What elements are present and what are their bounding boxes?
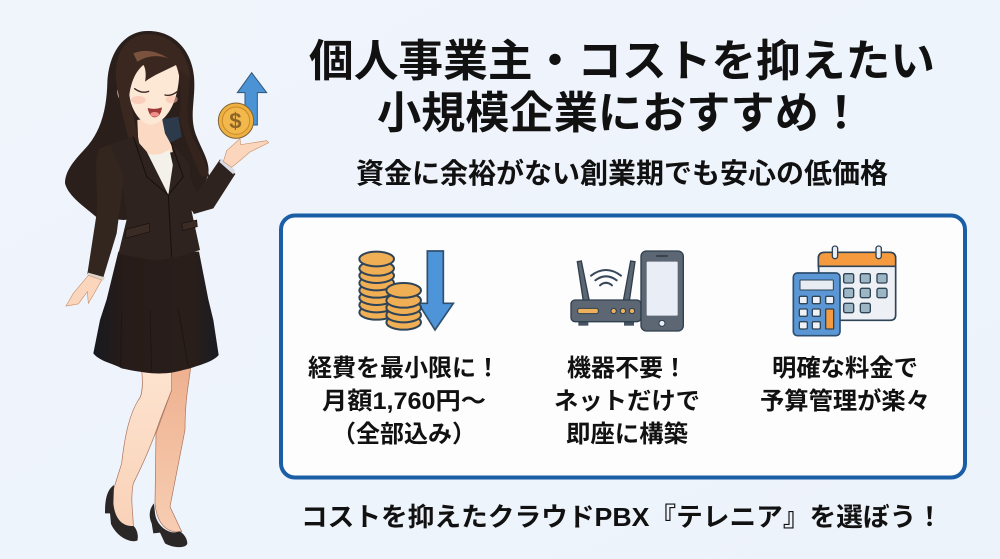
title: 小規模企業におすすめ！	[377, 89, 863, 138]
title	[309, 37, 935, 138]
neck shadow	[157, 117, 182, 143]
face	[128, 53, 179, 125]
lapels	[133, 137, 183, 257]
benefit text: cost	[308, 355, 500, 448]
shoe left	[105, 485, 138, 541]
cuff right	[219, 159, 235, 174]
benefit text: cost: 月額1,760円～	[322, 388, 486, 415]
benefit text: no equipment	[554, 355, 700, 448]
character: businesswoman upper body	[65, 31, 269, 306]
panel: benefits card	[281, 216, 965, 478]
cuff left	[87, 273, 105, 281]
benefit text: clear pricing: 明確な料金で	[772, 355, 918, 382]
benefit text: cost: 経費を最小限に！	[308, 355, 500, 382]
up arrow	[237, 73, 267, 125]
benefit text: clear pricing	[760, 355, 930, 415]
subtitle: 資金に余裕がない創業期でも安心の低価格	[356, 157, 888, 189]
hand right	[223, 139, 269, 167]
blush	[131, 95, 178, 104]
benefit text: cost: （全部込み）	[332, 421, 476, 448]
skirt	[93, 252, 219, 373]
benefit text: no equipment: 即座に構築	[566, 421, 688, 448]
leg back	[155, 368, 191, 532]
ear	[117, 84, 124, 99]
icon: coins with down arrow	[359, 251, 453, 330]
skirt folds	[121, 310, 188, 372]
benefit text: clear pricing: 予算管理が楽々	[760, 387, 930, 415]
hair right strand	[179, 70, 209, 177]
footer call to action: コストを抑えたクラウドPBX『テレニア』を選ぼう！	[301, 502, 943, 532]
hair back	[65, 31, 209, 220]
gold coin	[218, 103, 254, 138]
hand left	[66, 275, 102, 306]
icon: calendar and calculator	[793, 246, 896, 336]
shoe right	[150, 503, 187, 547]
closed eyes	[135, 89, 178, 95]
jacket pockets	[125, 220, 197, 238]
icon: router and smartphone	[571, 251, 683, 331]
benefit text: no equipment: ネットだけで	[554, 388, 700, 415]
leg front	[113, 370, 172, 527]
blouse	[147, 149, 174, 195]
neck and chest	[137, 117, 175, 157]
hair top and bangs	[116, 34, 191, 175]
benefit text: no equipment: 機器不要！	[567, 355, 687, 382]
smiling mouth	[148, 107, 162, 117]
title: 個人事業主・コストを抑えたい	[309, 37, 935, 86]
jacket torso	[103, 137, 200, 261]
arm right	[189, 159, 235, 214]
hair highlight	[133, 51, 168, 62]
arm left	[87, 145, 124, 277]
character: skirt and legs	[93, 252, 219, 547]
gold coin: $	[229, 109, 241, 134]
